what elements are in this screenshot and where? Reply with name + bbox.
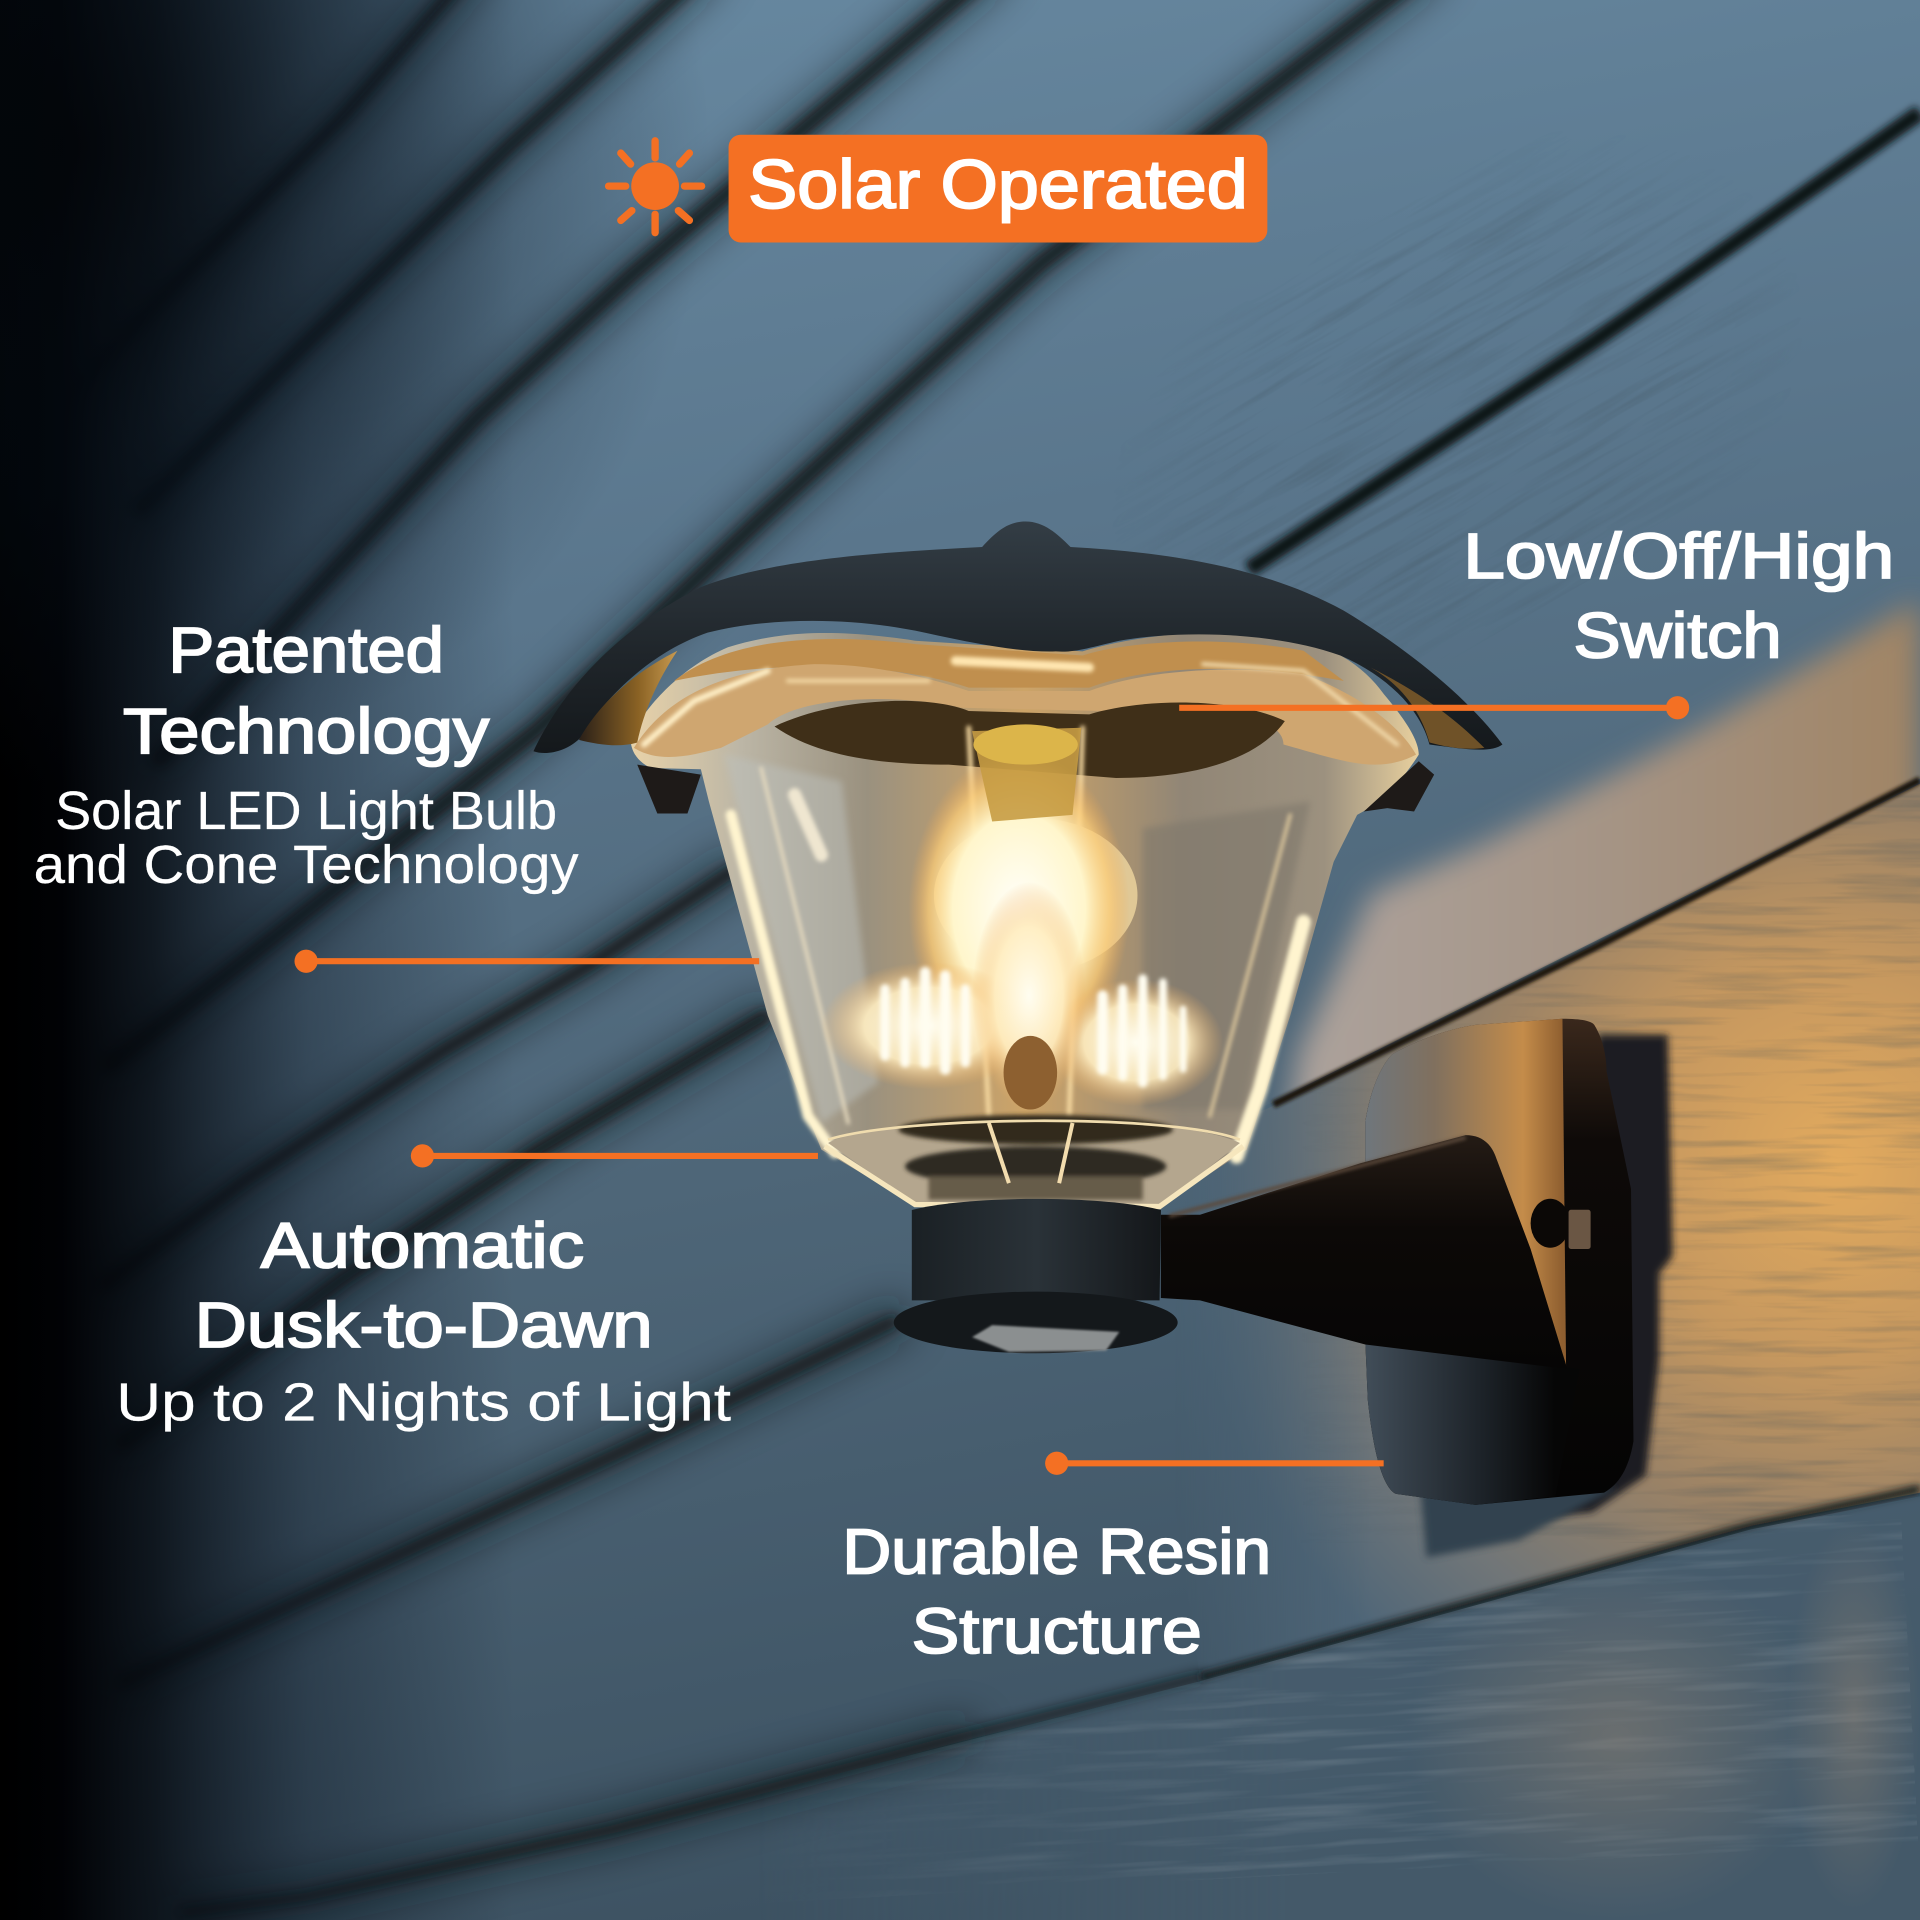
heading: Automatic [261, 1210, 584, 1281]
switch notch [1531, 1199, 1591, 1249]
glass outer highlights [644, 661, 1397, 1156]
badge text: Solar Operated [748, 146, 1248, 223]
lamp assembly, traced in zoom space [533, 522, 1502, 1353]
cap logo [972, 1325, 1119, 1352]
badge background [729, 135, 1267, 242]
ribbed reflections [885, 972, 1183, 1083]
upper rim [634, 664, 1416, 765]
hood inner reflection right [1371, 668, 1484, 749]
side clips [637, 761, 1434, 813]
warm light on upper plank [1286, 600, 1920, 1133]
inner dark opening [775, 701, 1285, 778]
base collar [912, 1199, 1161, 1300]
heading line two: Dusk-to-Dawn [195, 1290, 653, 1361]
heading line two: Structure [912, 1596, 1202, 1667]
warm lit plank [1248, 784, 1920, 1648]
heading line two: Technology [123, 696, 489, 767]
lower shade ring [828, 1120, 1240, 1207]
icon: sun [609, 141, 702, 233]
heading: Durable Resin [842, 1516, 1271, 1587]
LED bulb glow [821, 724, 1223, 1109]
lower plank with faint reflections [886, 1496, 1920, 1920]
centre column [972, 882, 1086, 1109]
bulb base [1004, 1036, 1057, 1109]
right clear pane [1143, 801, 1310, 1109]
heading: Patented [168, 615, 444, 686]
bulb neck [972, 728, 1081, 822]
description: Up to 2 Nights of Light [116, 1372, 731, 1432]
callout: patented technology [34, 615, 759, 973]
bulb cap [973, 724, 1078, 765]
left dark vignette [0, 0, 784, 1920]
glass shade [631, 632, 1419, 1207]
hood [533, 522, 1502, 753]
arm [1161, 1135, 1567, 1369]
callout: automatic dusk-to-dawn [116, 1144, 818, 1432]
description: Solar LED Light Bulb [55, 781, 557, 841]
leader line [1179, 696, 1689, 719]
leader line [411, 1144, 818, 1168]
leader line [1045, 1452, 1384, 1475]
siding wood grain: upper planks [1245, 204, 1691, 600]
plate lower area [1365, 1341, 1580, 1505]
heading line two: Switch [1573, 601, 1782, 672]
top band under hood [674, 639, 1344, 688]
leader line [294, 950, 759, 973]
top badge: solar operated [609, 135, 1267, 242]
base cap [894, 1292, 1178, 1353]
wall bracket [1161, 1019, 1633, 1505]
reflected glow left [821, 962, 1036, 1089]
hood inner reflection left [579, 651, 677, 745]
heading: Low/Off/High [1463, 521, 1894, 592]
callout: low/off/high switch [1179, 521, 1894, 719]
plate lit area [1365, 1019, 1566, 1371]
plank grain [1526, 790, 1920, 1543]
reflected glow right [1049, 979, 1223, 1106]
plate body [1365, 1019, 1633, 1505]
lantern [533, 522, 1673, 1558]
left clear pane [724, 755, 878, 1123]
wall plate shadow [1420, 1035, 1673, 1558]
plank edge grooves [1200, 780, 1920, 1678]
bulb envelope [934, 818, 1137, 972]
stacked inner discs [898, 1115, 1173, 1200]
description line two: and Cone Technology [34, 835, 579, 895]
arm highlight [1169, 1138, 1466, 1216]
callout: durable resin structure [842, 1452, 1384, 1667]
